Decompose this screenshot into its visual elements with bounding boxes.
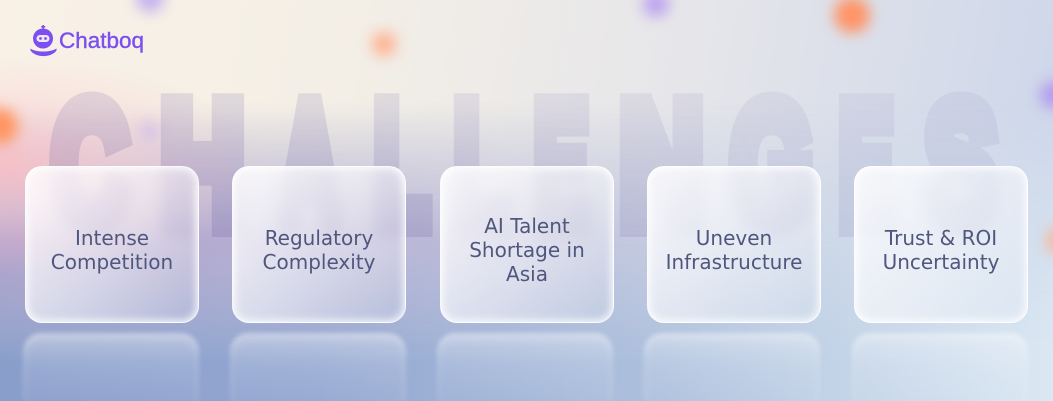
big background word: CHALLENGES bbox=[49, 92, 1000, 237]
card: Regulatory Complexity bbox=[232, 166, 406, 323]
card: Intense Competition: Intense bbox=[75, 226, 149, 250]
card: AI Talent Shortage in Asia: Asia bbox=[506, 262, 548, 286]
big background word: CHALLENGES: E bbox=[839, 68, 894, 262]
big background word: CHALLENGES: E bbox=[534, 68, 589, 262]
logo: Chatboq bbox=[30, 25, 144, 56]
card: AI Talent Shortage in Asia: AI Talent bbox=[484, 214, 570, 238]
card: Intense Competition: Competition bbox=[51, 250, 173, 274]
big background word: CHALLENGES: C bbox=[52, 69, 127, 263]
big background word: CHALLENGES: L bbox=[374, 68, 429, 263]
card: Intense Competition bbox=[25, 166, 199, 323]
card: Trust & ROI Uncertainty: Uncertainty bbox=[883, 250, 999, 274]
logo wordmark: Chatboq bbox=[59, 28, 144, 53]
card: Trust & ROI Uncertainty: Trust & ROI bbox=[885, 226, 997, 250]
big background word: CHALLENGES: L bbox=[454, 68, 509, 263]
card: Trust & ROI Uncertainty bbox=[854, 166, 1028, 323]
card: Regulatory Complexity: Complexity bbox=[263, 250, 375, 274]
icon: robot head bbox=[30, 25, 56, 56]
big background word: CHALLENGES: N bbox=[620, 69, 703, 263]
big background word: CHALLENGES: G bbox=[731, 69, 812, 263]
big background word: CHALLENGES: S bbox=[925, 68, 997, 262]
big background word: CHALLENGES: A bbox=[279, 69, 341, 263]
card: Uneven Infrastructure: Infrastructure bbox=[666, 250, 802, 274]
card: AI Talent Shortage in Asia bbox=[440, 166, 614, 323]
card: Uneven Infrastructure: Uneven bbox=[696, 226, 772, 250]
big background word: CHALLENGES: H bbox=[161, 69, 244, 263]
card: AI Talent Shortage in Asia: Shortage in bbox=[469, 238, 585, 262]
card: Regulatory Complexity: Regulatory bbox=[265, 226, 373, 250]
card: Uneven Infrastructure bbox=[647, 166, 821, 323]
